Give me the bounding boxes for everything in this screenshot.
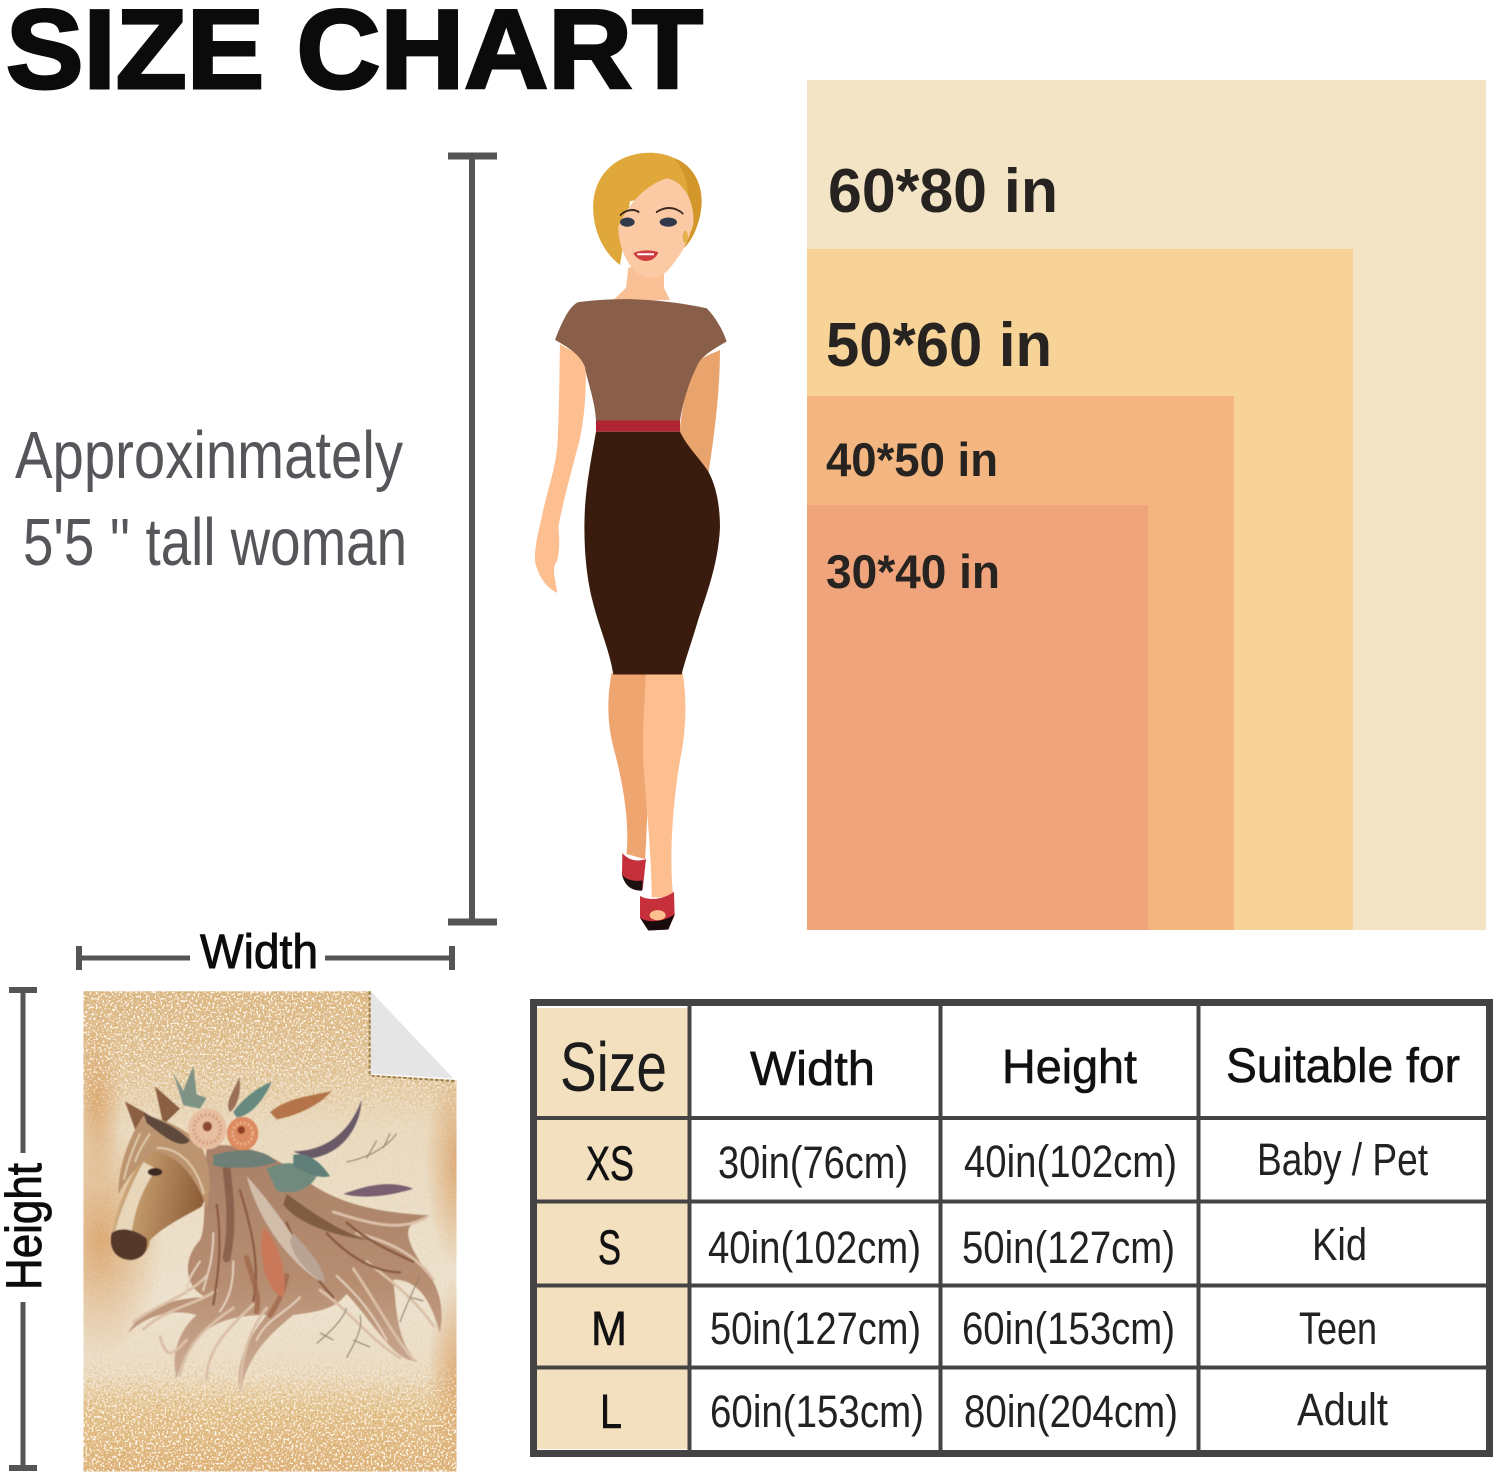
size block: 60*80 in: 60*80 in bbox=[828, 157, 1058, 226]
size block: 40*50 in: 40*50 in bbox=[826, 433, 998, 486]
row S: Kid bbox=[1312, 1219, 1367, 1270]
row L: Adult bbox=[1297, 1384, 1388, 1435]
table header and size column fills bbox=[537, 1008, 689, 1449]
width measuring bar: Width bbox=[200, 926, 318, 979]
row S: 50in(127cm) bbox=[962, 1222, 1175, 1273]
face bbox=[618, 178, 693, 278]
belt bbox=[596, 420, 680, 432]
size block: 50*60 in: 50*60 in bbox=[826, 311, 1052, 380]
row XS: 30in(76cm) bbox=[718, 1137, 908, 1188]
flowers bbox=[143, 1108, 258, 1150]
height note text: Approxinmately bbox=[15, 418, 403, 493]
row XS: 40in(102cm) bbox=[964, 1136, 1177, 1187]
row XS: Baby / Pet bbox=[1257, 1134, 1428, 1185]
glitter edge along the fold bbox=[370, 991, 457, 1081]
table header row bbox=[560, 1028, 1460, 1106]
size block: 30*40 in bbox=[807, 505, 1148, 930]
size block: 60*80 in bbox=[807, 80, 1486, 930]
table header row: Suitable for bbox=[1226, 1040, 1460, 1093]
row XS bbox=[586, 1134, 1428, 1191]
twigs bbox=[317, 1134, 423, 1358]
table header row: Height bbox=[1002, 1041, 1137, 1094]
dress top bbox=[555, 299, 727, 420]
mane bbox=[128, 1145, 442, 1393]
height note text bbox=[15, 418, 407, 580]
legs bbox=[608, 673, 647, 859]
hair bbox=[593, 153, 702, 265]
height measuring bar for blanket bbox=[0, 990, 52, 1468]
size block: 40*50 in bbox=[807, 396, 1234, 930]
size block: 50*60 in bbox=[807, 249, 1353, 930]
blanket background bbox=[83, 991, 457, 1472]
blanket with horse artwork bbox=[83, 991, 457, 1472]
row M: M bbox=[591, 1303, 627, 1356]
illustration: woman bbox=[535, 153, 727, 930]
row L: L bbox=[600, 1386, 622, 1439]
horse eye bbox=[148, 1168, 162, 1176]
row S bbox=[598, 1219, 1367, 1275]
row S: S bbox=[598, 1222, 621, 1275]
feather plumes bbox=[173, 1066, 413, 1297]
skirt bbox=[584, 432, 720, 674]
height measuring bar bbox=[448, 156, 497, 922]
front arm bbox=[535, 344, 586, 593]
horse head bbox=[112, 1150, 204, 1254]
size block: 30*40 in: 30*40 in bbox=[826, 545, 1000, 598]
shoes bbox=[622, 853, 646, 890]
forelock and crown bbox=[118, 1116, 210, 1208]
row L: 60in(153cm) bbox=[710, 1386, 924, 1437]
row L: 80in(204cm) bbox=[964, 1386, 1178, 1437]
glitter texture bbox=[83, 991, 457, 1472]
facial features bbox=[620, 208, 688, 261]
hair strands bbox=[133, 1169, 433, 1390]
row M bbox=[591, 1303, 1377, 1356]
row M: 60in(153cm) bbox=[962, 1303, 1175, 1354]
panel: nested blanket sizes bbox=[807, 80, 1486, 930]
size table bbox=[534, 1002, 1490, 1454]
table grid bbox=[534, 1002, 1490, 1454]
row S: 40in(102cm) bbox=[708, 1222, 921, 1273]
row XS: XS bbox=[586, 1138, 634, 1191]
neck bbox=[613, 268, 670, 300]
back arm bbox=[679, 350, 720, 474]
width measuring bar bbox=[79, 926, 452, 979]
table header row: Width bbox=[750, 1043, 875, 1096]
row M: Teen bbox=[1299, 1303, 1377, 1354]
folded corner bbox=[371, 991, 453, 1078]
row M: 50in(127cm) bbox=[710, 1303, 921, 1354]
height note text: 5'5 '' tall woman bbox=[23, 505, 407, 580]
row L bbox=[600, 1384, 1388, 1439]
table header row: Size bbox=[560, 1028, 667, 1106]
horse ears bbox=[125, 1087, 180, 1134]
